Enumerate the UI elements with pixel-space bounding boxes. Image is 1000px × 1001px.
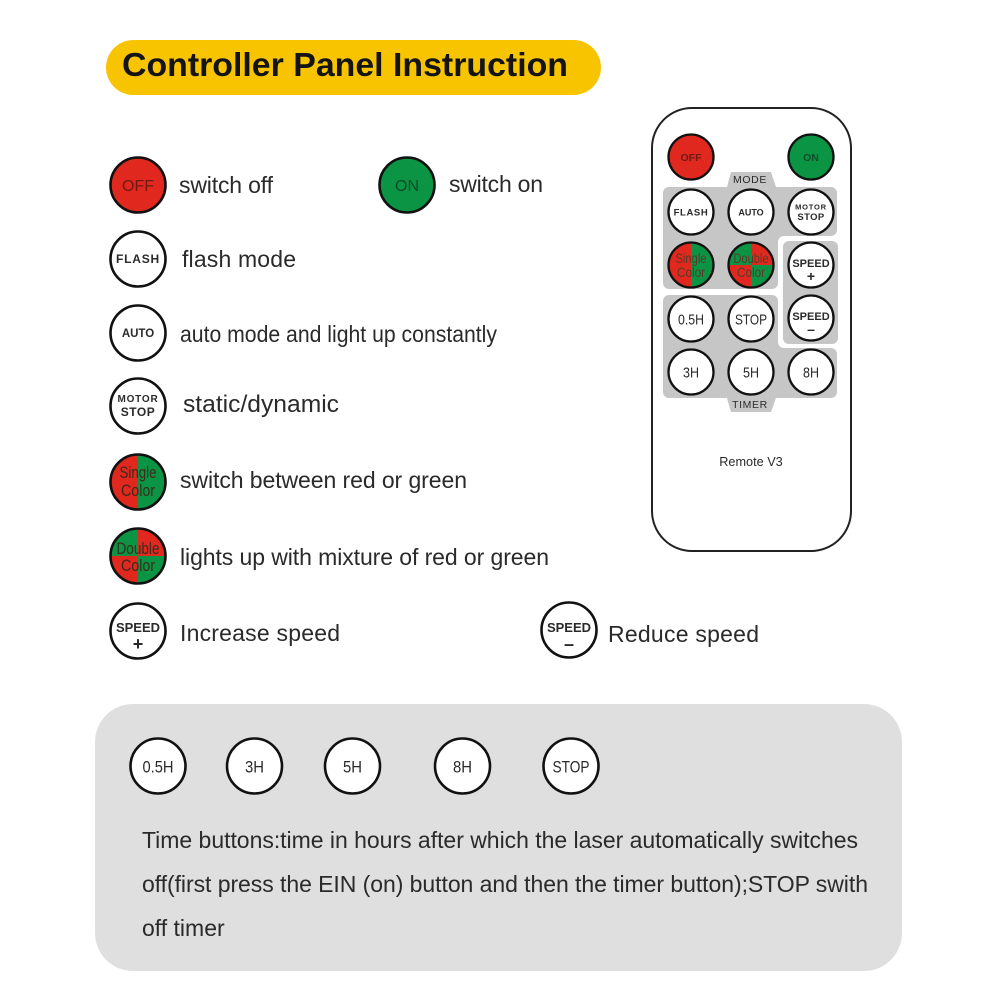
single color key — [668, 242, 714, 288]
on key: ON — [803, 152, 819, 164]
icon: on button — [380, 158, 434, 212]
double color key — [728, 242, 774, 288]
motor stop key — [788, 190, 834, 234]
motor stop key: STOP — [797, 212, 825, 223]
icon: speed minus button — [542, 602, 596, 658]
0.5H button: 0.5H — [142, 758, 174, 776]
timer label: TIMER — [732, 399, 768, 411]
icon: off button — [110, 158, 166, 212]
icon: auto button: AUTO — [122, 328, 154, 340]
stop button: STOP — [552, 758, 590, 776]
mode keypad background — [663, 172, 837, 289]
remote model label: Remote V3 — [719, 455, 783, 469]
flash key: FLASH — [674, 208, 708, 218]
5H button — [325, 738, 380, 794]
3H key — [668, 350, 714, 394]
stop key — [728, 296, 774, 342]
icon: flash button — [110, 232, 166, 286]
0.5H key — [668, 296, 714, 342]
label: increase speed: Increase speed — [180, 620, 340, 646]
3H button — [227, 738, 282, 794]
on key — [788, 134, 834, 180]
timer keypad background — [663, 295, 837, 412]
icon: double color button — [110, 528, 166, 584]
mode label: MODE — [733, 174, 767, 186]
speed minus key: – — [807, 321, 815, 337]
stop key: STOP — [735, 312, 767, 328]
8H key: 8H — [803, 364, 819, 382]
icon: single color button — [110, 454, 166, 510]
0.5H key: 0.5H — [678, 312, 704, 328]
auto key — [728, 190, 774, 234]
8H button: 8H — [453, 758, 472, 776]
5H key — [728, 350, 774, 394]
5H button: 5H — [343, 758, 362, 776]
remote control — [652, 108, 851, 551]
label: switch between: switch between red or green — [180, 467, 467, 493]
icon: motor stop button: MOTOR — [117, 394, 159, 405]
speed plus key — [788, 242, 834, 288]
speed keypad background — [783, 241, 838, 344]
8H button — [435, 738, 490, 794]
label: auto mode: auto mode and light up constantly — [180, 321, 497, 347]
explanation text: Time buttons:time in hours after which the laser automatically switches — [142, 827, 858, 853]
speed minus key: SPEED — [792, 311, 830, 323]
title: Controller Panel Instruction — [122, 47, 568, 84]
icon: motor stop button — [110, 378, 166, 434]
label: static/dynamic: static/dynamic — [183, 391, 339, 418]
icon: on button: ON — [395, 178, 419, 195]
icon: double color button: Double — [116, 539, 160, 558]
double color key: Color — [737, 264, 765, 280]
panel: time buttons — [95, 704, 902, 971]
label: lights up: lights up with mixture of red or green — [180, 544, 549, 570]
speed plus key: SPEED — [792, 258, 830, 270]
icon: speed minus button: SPEED — [547, 620, 591, 635]
icon: speed plus button — [110, 604, 166, 658]
icon: single color button: Single — [120, 463, 156, 482]
icon: speed plus button: SPEED — [116, 620, 160, 635]
3H key: 3H — [683, 364, 699, 382]
label: flash mode: flash mode — [182, 246, 296, 272]
label: reduce speed: Reduce speed — [608, 621, 759, 647]
icon: single color button: Color — [121, 481, 155, 500]
0.5H button — [130, 738, 186, 794]
icon: double color button: Color — [121, 556, 155, 575]
8H key — [788, 350, 834, 394]
stop button — [544, 738, 598, 794]
single color key: Color — [677, 264, 705, 280]
explanation text: off timer — [142, 915, 225, 941]
icon: flash button: FLASH — [116, 252, 160, 266]
icon: speed plus button: + — [133, 634, 143, 654]
off key: OFF — [680, 152, 702, 164]
speed minus key — [788, 296, 834, 340]
explanation text — [142, 827, 868, 941]
motor stop key: MOTOR — [795, 202, 827, 212]
auto key: AUTO — [738, 208, 764, 218]
icon: speed minus button: – — [564, 634, 574, 654]
off key — [668, 134, 714, 180]
double color key: Double — [734, 250, 769, 266]
icon: off button: OFF — [122, 178, 154, 195]
5H key: 5H — [743, 364, 759, 382]
single color key: Single — [676, 250, 707, 266]
explanation text: off(first press the EIN (on) button and then the timer button);STOP swith — [142, 871, 868, 897]
icon: motor stop button: STOP — [121, 405, 155, 419]
3H button: 3H — [245, 758, 264, 776]
label: switch off: switch off — [179, 172, 274, 198]
title — [106, 40, 601, 95]
speed plus key: + — [807, 268, 815, 284]
flash key — [668, 190, 714, 234]
label: switch on: switch on — [449, 171, 543, 197]
icon: auto button — [110, 306, 166, 360]
